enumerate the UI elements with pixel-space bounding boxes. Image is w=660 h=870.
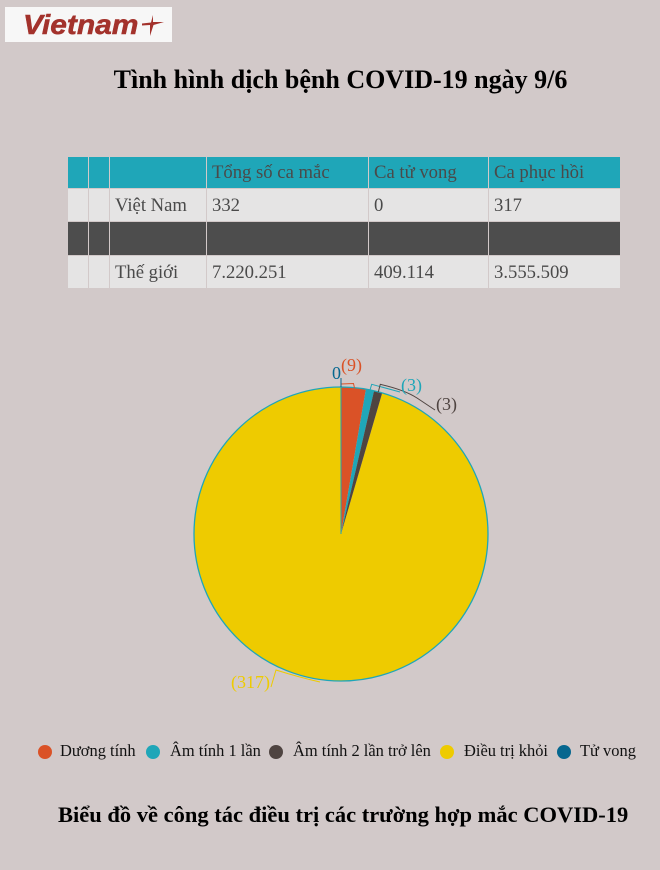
leader: 3 teal [370, 384, 400, 392]
pie outline [194, 387, 488, 681]
legend: Dương tính: Dương tính [60, 741, 136, 760]
table header row [68, 157, 620, 188]
row: Thế giới: 7.220.251 [212, 262, 287, 283]
slice: Âm tính 2 lần trở lên [341, 391, 382, 534]
row: Việt Nam [68, 189, 620, 221]
label: 3 dark: (3) [436, 394, 457, 415]
leader: 317 [271, 670, 320, 687]
label: 0: 0 [332, 363, 341, 383]
leader: 9 [341, 384, 354, 388]
row: Việt Nam: 332 [212, 195, 240, 216]
row: Thế giới: 3.555.509 [494, 262, 569, 283]
row: Việt Nam: 317 [494, 195, 522, 216]
leader: 0 [340, 378, 342, 387]
row: Thế giới: Thế giới [115, 262, 178, 283]
leader: 3 dark [378, 384, 435, 410]
logo [5, 7, 172, 42]
slice: Dương tính [341, 387, 366, 534]
data table [68, 157, 620, 288]
label: 317: (317) [231, 672, 270, 693]
slice: Âm tính 1 lần [341, 389, 374, 534]
row: Việt Nam: Việt Nam [115, 195, 187, 216]
slice: Tử vong [340, 387, 342, 534]
row: Việt Nam: 0 [374, 195, 383, 216]
dark separator row [68, 222, 620, 255]
legend: Điều trị khỏi: Điều trị khỏi [464, 741, 548, 760]
legend: Âm tính 2 lần trở lên: Âm tính 2 lần trở lên [293, 741, 431, 760]
legend [38, 741, 636, 760]
table header row: Tổng số ca mắc [212, 162, 330, 183]
legend: Tử vong: Tử vong [580, 741, 636, 760]
slice: Điều trị khỏi [194, 387, 488, 681]
row: Thế giới [68, 256, 620, 288]
title: Tình hình dịch bệnh COVID-19 ngày 9/6 [114, 65, 567, 94]
table header row: Ca tử vong [374, 162, 457, 183]
label: 3 teal: (3) [401, 375, 422, 396]
chart caption: Biểu đồ về công tác điều trị các trường hợp mắc COVID-19 [58, 802, 628, 827]
label: 9: (9) [341, 355, 362, 376]
pie chart [193, 355, 489, 693]
logo: Vietnam [23, 9, 138, 40]
row: Thế giới: 409.114 [374, 262, 434, 283]
table header row: Ca phục hồi [494, 162, 584, 183]
legend: Âm tính 1 lần: Âm tính 1 lần [170, 741, 261, 760]
